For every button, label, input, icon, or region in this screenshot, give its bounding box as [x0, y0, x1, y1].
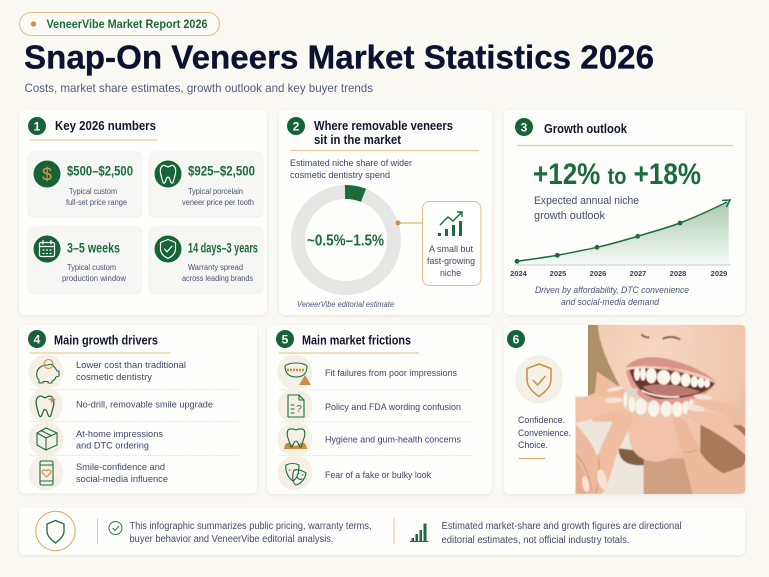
badge 6: 6 — [513, 332, 520, 346]
background below face — [576, 418, 644, 494]
card: warranty spread — [149, 227, 263, 294]
chin — [627, 402, 689, 462]
text: lower cost — [76, 360, 186, 383]
text: at-home impressions — [76, 429, 163, 452]
heading: Key 2026 numbers — [55, 118, 156, 133]
icon: tooth with sparkle — [29, 388, 63, 422]
growth description: Expected annual niche — [534, 195, 639, 207]
icon: tooth with gums — [278, 422, 312, 456]
icon: gold shield — [515, 356, 563, 404]
icon: rising bars — [438, 212, 462, 236]
text: at-home impressions: and DTC ordering — [76, 440, 149, 452]
card: porcelain per tooth: Typical porcelain — [188, 187, 243, 196]
badge 1: 1 — [34, 119, 41, 133]
card: production window: 3–5 weeks — [67, 240, 120, 256]
line chart: 2025 — [550, 269, 566, 278]
drivers note: and social-media demand — [561, 297, 660, 307]
nose — [636, 323, 695, 344]
heading: Where removable veneers — [314, 118, 453, 133]
hair — [584, 325, 620, 398]
card: custom full-set price: Typical custom — [69, 187, 117, 196]
tagline: Convenience. — [518, 428, 571, 439]
icon: phone with heart — [28, 456, 64, 490]
badge 6 — [507, 330, 525, 348]
badge 4 — [28, 330, 46, 348]
donut chart: ~0.5%–1.5% — [307, 232, 384, 250]
description: Estimated niche share of wider — [290, 158, 412, 169]
line chart: 2026 — [590, 269, 606, 278]
heading — [314, 118, 453, 147]
text: smile-confidence — [76, 462, 168, 485]
report badge: VeneerVibe Market Report 2026 — [46, 19, 208, 31]
heading: Growth outlook — [544, 121, 628, 136]
card: porcelain per tooth: $925–$2,500 — [188, 164, 255, 178]
panel: main growth drivers — [19, 325, 257, 494]
icon: ill-fitting teeth with warning — [278, 354, 312, 390]
card: production window: Typical custom — [67, 263, 116, 272]
card: warranty spread: 14 days–3 years — [188, 240, 258, 256]
card: production window: production window — [62, 274, 126, 283]
line chart: 2029 — [711, 269, 727, 278]
growth description: growth outlook — [534, 210, 605, 222]
drivers note: Driven by affordability, DTC convenience — [535, 285, 689, 295]
card: custom full-set price: $ — [42, 164, 52, 184]
photo: woman fitting snap-on veneers — [572, 322, 749, 498]
badge 1 — [28, 117, 46, 135]
card: custom full-set price: full-set price range — [66, 198, 128, 207]
note: estimates: Estimated market-share and growth figures are directional — [442, 521, 682, 532]
icon: check circle — [109, 522, 122, 534]
text: smile-confidence: Smile-confidence and — [76, 462, 165, 473]
panel: confidence, convenience, choice — [504, 322, 749, 498]
subtitle: Costs, market share estimates, growth outlook and key buyer trends — [24, 81, 373, 95]
upper lip — [625, 357, 717, 382]
text: fit failures: Fit failures from poor impressions — [325, 368, 457, 379]
panel: growth outlook — [504, 110, 745, 315]
description — [290, 158, 412, 181]
nails — [581, 385, 713, 492]
source note: VeneerVibe editorial estimate — [297, 300, 395, 309]
icon: outlined shield — [36, 511, 75, 551]
icon: green bars — [410, 524, 428, 542]
callout connector — [396, 220, 422, 226]
badge 2: 2 — [293, 119, 300, 133]
panel: key 2026 numbers — [19, 110, 267, 315]
callout: small but fast-growing niche: niche — [440, 268, 461, 279]
footer strip — [19, 508, 745, 555]
icon: document with question mark — [278, 388, 312, 424]
text: no-drill: No-drill, removable smile upgrade — [76, 400, 213, 410]
growth description — [534, 195, 639, 222]
veneer tray — [625, 388, 638, 397]
line chart: 2024 — [510, 269, 528, 278]
tagline: Confidence. — [518, 415, 565, 426]
heading: Main market frictions — [302, 332, 411, 348]
text: fear of fake look: Fear of a fake or bulky look — [325, 470, 431, 481]
tagline — [518, 415, 571, 451]
line chart: 2028 — [670, 269, 686, 278]
callout: small but fast-growing niche: A small but — [429, 244, 473, 255]
note: sources: buyer behavior and VeneerVibe editorial analysis. — [130, 534, 334, 545]
card: custom full-set price: $500–$2,500 — [67, 164, 133, 178]
tagline: Choice. — [518, 440, 548, 451]
badge 3 — [515, 118, 533, 136]
panel: main market frictions — [267, 325, 492, 494]
text: lower cost: Lower cost than traditional — [76, 360, 186, 371]
drivers note — [535, 285, 689, 307]
callout: small but fast-growing niche: fast-growing — [427, 256, 475, 267]
report badge — [20, 12, 220, 36]
icon: parcel box — [28, 422, 64, 456]
icon: theatre masks — [278, 456, 312, 490]
icon: document with question mark: ? — [296, 404, 302, 415]
panel: where removable veneers sit — [279, 110, 492, 315]
text: policy wording: Policy and FDA wording confusion — [325, 402, 461, 413]
lower lip — [626, 368, 716, 406]
text: smile-confidence: social-media influence — [76, 474, 168, 485]
card: warranty spread: Warranty spread — [188, 263, 243, 272]
note: estimates — [442, 521, 682, 546]
card: custom full-set price — [28, 152, 142, 218]
badge 3: 3 — [521, 120, 528, 134]
card: production window — [28, 227, 142, 294]
upper teeth — [634, 367, 710, 388]
description: cosmetic dentistry spend — [290, 170, 390, 181]
badge 5: 5 — [282, 332, 289, 346]
card: porcelain per tooth — [149, 152, 263, 218]
heading: sit in the market — [314, 132, 402, 147]
card: warranty spread: across leading brands — [182, 274, 253, 283]
badge 5 — [276, 330, 294, 348]
line chart: 2027 — [630, 269, 646, 278]
text: hygiene: Hygiene and gum-health concerns — [325, 434, 461, 446]
text: lower cost: cosmetic dentistry — [76, 372, 152, 383]
right hand — [694, 399, 746, 429]
badge 4: 4 — [34, 332, 41, 346]
line chart — [510, 200, 731, 278]
card: porcelain per tooth: veneer price per tooth — [182, 198, 254, 207]
note: sources — [130, 521, 372, 545]
title: Snap-On Veneers Market Statistics 2026 — [24, 40, 654, 76]
note: estimates: editorial estimates, not official industry totals. — [442, 535, 630, 546]
donut chart — [298, 192, 394, 288]
note: sources: This infographic summarizes public pricing, warranty terms, — [130, 521, 372, 532]
left fingers — [586, 386, 624, 398]
callout: small but fast-growing niche — [422, 202, 481, 286]
icon: piggy bank — [28, 354, 64, 390]
heading: Main growth drivers — [54, 332, 158, 348]
big growth figure: +12% to +18% — [533, 158, 701, 191]
badge 2 — [287, 117, 305, 135]
mouth interior — [629, 368, 715, 399]
text: at-home impressions: At-home impressions — [76, 429, 163, 440]
